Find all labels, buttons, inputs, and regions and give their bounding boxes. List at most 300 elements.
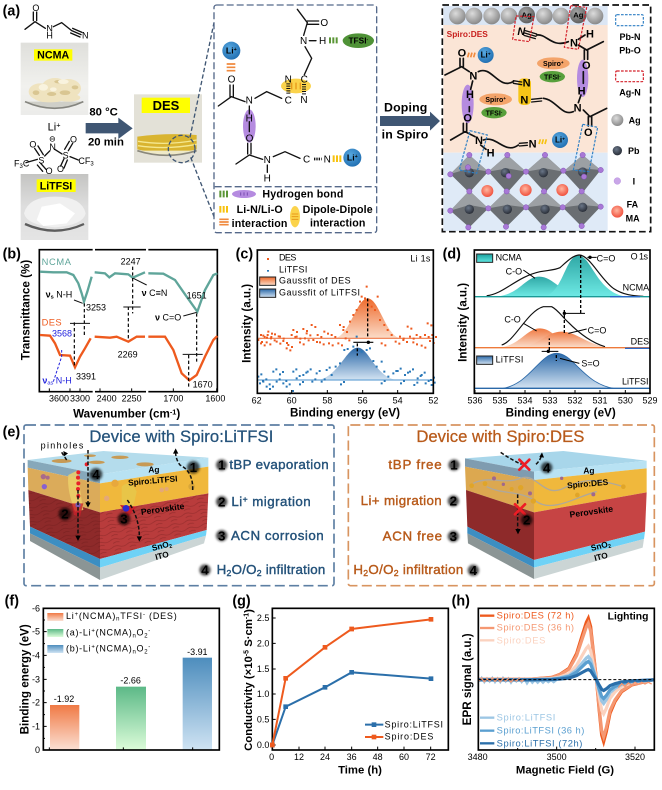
legend: Spiro:LiTFSI (72h) [497,738,582,748]
legend [611,15,643,224]
ticks [272,618,431,750]
NCMA structure: N [46,24,53,34]
y axis title: Transmittance (%) [19,260,32,360]
legend: FA [627,200,639,210]
ticks [475,390,625,393]
LiTFSI device frame [24,425,334,586]
Li+ ion right: Li [347,153,355,163]
spiro+ and TFSI- ions: Spiro [485,97,503,104]
NCMA curve [40,272,217,312]
legend: Spiro:LiTFSI (36 h) [497,726,584,736]
Li+ ion left: + [234,47,237,53]
tick labels: 3300 [70,394,90,404]
panel e: DES device [348,425,654,586]
legend: - [148,645,151,651]
DES effects list [353,457,463,578]
tick labels: 0 [269,752,274,762]
DES effects list: O/O [368,562,393,577]
molecular structure: O [228,75,236,86]
DES photo [134,94,202,163]
tick labels: 2250 [122,394,142,404]
NCMA structure [25,3,88,40]
legend: Spiro:DES [385,732,433,742]
tick labels: 52 [428,395,438,405]
tick labels: 534 [517,395,532,405]
DES device block [465,451,647,579]
baselines [257,337,433,340]
LiTFSI effects list: tBP evaporation [229,457,329,472]
panel: hydrogen bonding inset [214,5,440,233]
TFSI structure: S [38,155,44,165]
LiTFSI effects list: 2 [257,568,262,578]
TFSI structure: C [23,159,30,169]
LiTFSI photo: LiTFSI [40,181,72,193]
baselines [474,297,650,388]
NCMA envelope [487,255,643,296]
label h: (h) [452,594,470,610]
peak annotations: 3568 [52,328,72,338]
legend: interaction [310,217,365,229]
x axis title: Magnetic Field (G) [516,765,614,777]
y tick labels: 1.5 [257,664,269,674]
spiro+ and TFSI- ions [479,57,570,118]
legend: interaction [232,218,287,230]
y tick labels: 0.0 [257,740,269,750]
x axis title: Time (h) [338,764,382,776]
Li ion label: + [56,120,61,129]
pinholes label: pinholes [41,440,84,450]
background layers [443,6,608,231]
tick labels: -1 [32,721,40,731]
peak annotations: N-H [53,375,72,385]
LiTFSI badges: 3 [218,528,225,543]
x axis title: Wavenumber (cm [73,408,170,421]
spiro chains: N [529,138,537,150]
tick labels: 530 [618,395,633,405]
tick labels: 56 [358,395,368,405]
peak annotations: 1670 [193,380,213,390]
y axis title: EPR signal (a.u.) [461,633,474,725]
ticks [478,747,635,750]
bar values [54,647,208,704]
DES effects list: H [353,562,363,577]
legend [260,253,431,298]
legend: LiTFSI [279,265,307,275]
Li ion label: Li [48,122,56,134]
legend: Li [66,611,75,621]
tick labels: 536 [467,395,482,405]
TFSI structure: F [14,159,19,169]
legend: Dipole-Dipole [303,204,373,216]
tick labels [49,394,225,404]
DES photo: DES [153,98,180,113]
tick labels: 12 [294,752,304,762]
spiro chains: N [475,135,483,147]
DES device block: Perovskite [569,504,614,520]
panel c: Li 1s XPS [236,246,438,420]
spiro+ and TFSI- ions: + [561,60,564,65]
Li+ ion left: Li [226,46,234,56]
in spiro label: in Spiro [382,127,429,141]
peak annotations: as [47,381,53,387]
Li+ ion right [343,149,361,167]
LiTFSI badges: 2 [218,494,225,509]
spiro chains: N [469,70,477,82]
ticks [43,608,193,750]
TFSI structure: O [70,135,77,145]
LiTFSI baseline [257,378,433,382]
doping label: Doping [384,101,427,115]
DES badges: 1 [450,458,458,473]
tick labels [269,752,436,762]
dashed guides and arrows [53,267,203,388]
panel g: conductivity [232,594,448,776]
spiro chains: H [578,85,586,97]
axes frame [272,608,448,750]
legend [365,719,443,742]
label g: (g) [232,594,251,610]
TFSI- ion: - [367,37,369,43]
spiro chains: H [466,89,474,101]
Lighting label: Lighting [608,612,648,623]
tick labels: 2400 [97,394,117,404]
molecular structure: O [246,133,254,144]
y axis title: Binding energy (eV) [19,624,32,734]
spiro chains: N [517,26,526,38]
legend: Gaussfit of LiTFSI [279,288,360,298]
LiTFSI badges: 4 [92,467,100,482]
DES device block: ITO [593,550,609,563]
DES effects list: 2 [394,568,399,578]
y axis title: Conductivity (×10 [243,656,255,751]
annotations and legend: LiTFSI [496,355,523,365]
tick labels: 529 [642,395,657,405]
tick labels: 72 [426,752,436,762]
legend: 2 [144,649,148,655]
spiro chains: N [523,77,531,89]
legend: + [75,612,79,618]
legend [47,611,178,655]
TFSI structure: O [46,166,53,176]
y axis title: -5 [244,650,251,656]
NCMA photo: NCMA [37,50,69,62]
LiTFSI effects list: ACN corrosion [231,528,324,543]
y axis title: Intensity (a.u.) [240,284,253,363]
tick labels: 3500 [547,752,567,762]
bar values: -1.92 [54,694,74,704]
legend: (NCMA) [79,611,116,621]
TFSI structure: N [49,142,56,152]
Li+ ion right: + [355,154,358,160]
legend: Pb [628,146,640,156]
tick labels: -3 [32,674,40,684]
legend divider [215,185,376,189]
legend: n [132,633,137,639]
LiTFSI effects list: migration [248,494,311,509]
LiTFSI effects list: + [243,494,248,504]
panel f: binding energy bars [5,594,219,755]
legend: + [91,629,96,635]
panel b: FTIR spectra [3,246,225,421]
legend: I [633,176,635,186]
time label: 20 min [88,136,124,148]
axes frame [39,250,217,392]
guide lines and arrows [523,255,597,363]
TFSI structure: CF [78,156,90,166]
legend: Li-N/Li-O [237,204,283,216]
spiro chains: O [584,127,593,139]
TFSI structure [14,135,94,176]
DES badges: 4 [470,563,478,578]
blocked arrows [501,452,544,534]
legend: - [143,612,146,618]
shift markers [353,298,373,356]
tick labels: 532 [567,395,582,405]
label c: (c) [236,246,253,262]
LiTFSI device block: Ag [148,464,159,474]
legend [219,189,373,230]
Li+ ions: + [488,51,491,57]
LiTFSI device block [28,451,208,580]
DES device frame [348,425,654,586]
molecular structure: N [264,155,271,166]
DES device title: Device with Spiro:DES [416,427,584,446]
DES curve [40,335,217,380]
y axis title: -1 [244,613,251,619]
annotations and legend: C=O [597,253,615,263]
NCMA structure: N [82,30,88,40]
LiTFSI fit [503,353,613,388]
spiro+ and TFSI- ions: Spiro [543,61,561,68]
label a: (a) [3,4,20,20]
annotations and legend: NCMA [496,253,522,263]
DES gaussian fit [335,298,400,338]
legend: Pb-O [619,45,641,55]
LiTFSI photo [21,174,88,240]
tick labels: -6 [32,603,40,613]
annotations and legend: C-O [506,266,522,276]
molecular structure: N [300,36,307,47]
Spiro:DES label: Spiro:DES [447,29,488,39]
Ag atoms: Ag [522,11,532,20]
LiTFSI gaussian fit [318,348,397,380]
molecular structure: N [246,96,253,107]
tick labels: 60 [287,395,297,405]
DES device block: SnO [590,539,609,553]
LiTFSI arrows [62,450,193,539]
Ag atoms: Ag [573,11,584,20]
annotations and legend: S=O [581,358,600,368]
legend: TFSI [120,611,143,621]
annotations and legend: C-O [504,314,521,324]
tick labels [467,395,657,405]
tick labels: 54 [393,395,403,405]
annotations and legend: LiTFSI [622,377,648,387]
tick labels: -5 [32,627,40,637]
LiTFSI badges: 1 [190,460,198,475]
arrow: mix [86,118,133,139]
spiro chains: N [570,37,578,49]
peak annotations: 2269 [118,350,138,360]
interaction bars [227,37,340,162]
peak annotations: ν [46,289,51,299]
annotations and legend: NCMA [623,282,649,292]
peak annotations: 3253 [86,302,106,312]
LiTFSI device block: Perovskite [140,501,185,517]
molecular structure: O [320,18,328,29]
y tick labels [257,613,269,750]
legend: - [148,629,151,635]
peak annotations: s [51,295,54,301]
NCMA structure: O [32,3,39,13]
legend: Pb-N [620,32,640,42]
tick labels: 60 [399,752,409,762]
legend [480,610,584,748]
peak annotations: ν C=O [155,312,181,322]
molecular structure [218,9,331,184]
Pb-N Pb-O highlight boxes [459,124,598,173]
spiro+ and TFSI- ions: TFSI [486,110,501,117]
peak annotations: 3391 [76,372,96,382]
bars [50,658,212,750]
legend: Ag [629,115,641,125]
tick labels [468,752,645,762]
TFSI structure: 3 [90,161,94,167]
arrowheads [63,448,178,542]
spiro chains: N [520,94,528,106]
label e: (e) [3,424,20,440]
TFSI structure: O [29,140,36,150]
annotations and legend: C=O [588,326,606,336]
legend: Spiro:LiTFSI [385,719,443,729]
Ag atoms [449,7,603,24]
annotations and legend: O 1s [631,251,648,261]
LiTFSI badges: 1 [218,458,226,473]
LiTFSI device block: 2 [169,544,173,550]
Li+ ions: + [562,136,565,142]
tick labels: 48 [373,752,383,762]
peak annotations: 1651 [187,290,207,300]
y tick labels: 1.0 [257,689,269,699]
tick labels: 1600 [205,394,225,404]
legend: 2 [144,633,148,639]
axes frame [257,250,433,393]
legend: O [137,628,144,638]
TFSI- ion: TFSI [348,36,367,46]
LiTFSI badges: 3 [120,512,128,527]
tick labels: 535 [492,395,507,405]
legend: Ag-N [619,88,641,98]
legend: O [137,644,144,654]
legend: Spiro:DES (72 h) [497,610,574,620]
LiTFSI effects list [217,457,329,578]
spiro chains: H [586,28,594,40]
tick labels [32,603,40,755]
molecular structure: C [303,155,310,166]
spiro+ and TFSI- ions: - [559,73,561,78]
tick labels: 3600 [49,394,69,404]
DES badges: 4 [543,460,551,475]
y tick labels: 2.0 [257,638,269,648]
Li+ ion left [222,42,240,60]
bar values: -3.91 [187,647,208,657]
DES scatter points [258,287,436,350]
legend: DES [279,253,296,263]
tick labels: 3480 [468,752,488,762]
y axis title: ) [243,609,255,613]
LiTFSI effects list: O/O [232,562,256,577]
DES device block: Ag [583,466,594,476]
legend: (NCMA) [96,628,132,638]
DES badges [448,458,552,578]
tick labels: -4 [32,650,40,660]
arrow: doping [380,112,440,131]
LiTFSI effects list: infiltration [262,562,325,577]
tick labels: 0 [35,745,40,755]
spiro chains: O [582,60,591,72]
tick labels: 58 [322,395,332,405]
LiTFSI device block: ITO [154,549,170,562]
TFSI structure: S [63,151,69,161]
perovskite lattice [448,152,603,230]
LiTFSI device block: Spiro:LiTFSI [128,473,178,488]
molecular structure: H [319,36,326,47]
LiTFSI effects list: H [217,562,226,577]
legend: Li 1s [410,254,431,264]
panel h: EPR [452,594,654,777]
DES device block: Spiro:DES [567,477,609,490]
axes frame [43,608,219,750]
legend: (a)-Li [66,628,91,638]
NCMA photo [21,43,88,115]
tick labels: 62 [252,395,262,405]
tick labels: 36 [347,752,357,762]
molecular structure: C [285,95,292,106]
legend: Spiro:DES (36 h) [497,623,574,633]
y axis title: Intensity (a.u.) [457,283,470,362]
peak annotations: ν [42,375,47,385]
legend: (NCMA) [96,644,132,654]
y tick labels: 0.5 [257,714,269,724]
annotations and legend: DES [631,336,649,346]
temperature label: 80 °C [89,107,118,119]
panel: device interface schematic [442,5,651,232]
peak annotations: ν C≡N [142,288,167,298]
spiro+ and TFSI- ions: - [501,109,503,114]
LiTFSI effects list: Li [231,494,242,509]
tick labels: 1700 [163,394,183,404]
spiro+ and TFSI- ions: + [503,96,506,101]
x axis title: -1 [170,407,176,416]
spiro chains: N [574,102,582,114]
spiro chains: O [458,48,467,60]
legend: (b)-Li [66,644,91,654]
DES badges: 3 [450,529,457,544]
DES badges: 2 [450,494,457,509]
legend: Gaussfit of DES [279,276,351,286]
LiTFSI device block: SnO [151,539,170,553]
legend: Spiro:DES [497,635,545,645]
legend: MA [626,214,640,224]
baseline noise [479,678,556,684]
tick labels: 3520 [625,752,645,762]
annotations and legend [477,251,649,387]
legend: + [91,645,96,651]
LiTFSI badges: 2 [61,507,69,522]
y axis title: S·cm [243,619,255,650]
TFSI structure: ⊖ [49,135,56,144]
panel e: device comparison [3,424,334,586]
